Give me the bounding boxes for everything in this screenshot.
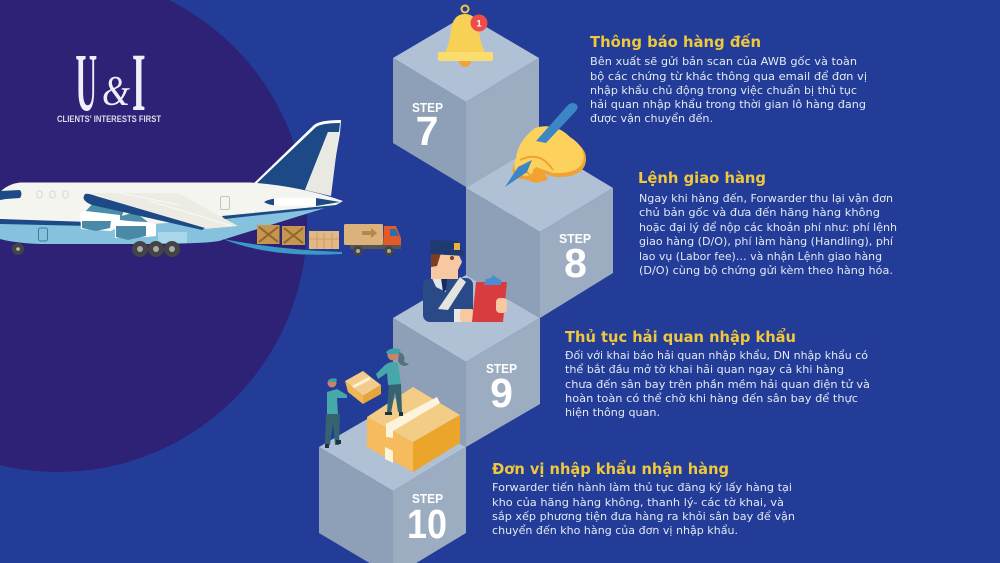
body: step 7: hải quan nhập khẩu trong thời gian lô hàng đang [590,98,866,111]
heading: step 10: Đơn vị nhập khẩu nhận hàng [492,459,729,478]
body: step 7: bộ các chứng từ khác thông qua email để đơn vị [590,70,867,83]
officer hat [430,240,464,256]
cube: step 9 [393,275,540,447]
body: step 8: chủ bản gốc và đưa đến hãng hàng không [639,206,880,219]
text block: step 9 [565,327,870,419]
logo: U&I: I [132,36,146,128]
step 8 number: 8 [564,240,587,286]
body: step 8: hoặc đại lý để nộp các khoản phí như: phí lệnh [639,221,897,234]
icon: worker woman [376,348,409,416]
body: step 8: Ngay khi hàng đến, Forwarder thu lại vận đơn [639,192,893,205]
heading: step 7: Thông báo hàng đến [590,32,761,51]
icon: hand with pen [505,103,586,187]
body stripes [0,205,336,226]
logo: U&I: U [76,37,97,129]
step 10 number: 10 [407,501,447,547]
wing [92,193,238,229]
step 7 number: 7 [416,108,438,154]
body: step 7: Bên xuất sẽ gửi bản scan của AWB gốc và toàn [590,55,857,68]
cube: step 7 [393,15,539,190]
engine 1 [80,211,120,231]
pylons [84,200,148,222]
purple background circle [0,0,307,472]
white cuff and hand [454,309,462,322]
icon: worker man [325,378,347,448]
body: step 7: nhập khẩu chủ động trong việc chuẩn bị thủ tục [590,84,857,97]
logo: U&I: CLIENTS' INTERESTS FIRST [57,114,161,125]
step 8 label: STEP [559,231,591,246]
logo: U&I: & [102,69,130,115]
cargo crates and truck [257,224,401,256]
body: step 9: chưa đến sân bay trên phần mềm hải quan điện tử và [565,378,870,391]
body: step 9: Đối với khai báo hải quan nhập khẩu, DN nhập khẩu có [565,349,868,362]
crate 1 [257,225,280,244]
step 9 label: STEP [486,361,517,376]
cabin windows [37,191,230,241]
body: step 10: Forwarder tiến hành làm thủ tục đăng ký lấy hàng tại [492,481,792,494]
tail fin [252,120,341,196]
body: step 9 [565,349,870,419]
cube: step 8 [466,144,613,318]
truck [344,224,401,256]
cargo ramp [223,239,342,255]
clipboard [472,282,507,322]
body: step 9: thể bắt đầu mở tờ khai hải quan ngay cả khi hàng [565,363,844,376]
body: step 10: kho của hãng hàng không, thanh lý- các tờ khai, và [492,496,784,509]
notification badge: 1 [476,18,482,30]
airplane illustration [0,120,343,257]
engine 2 [115,220,156,240]
text block: step 7 [590,32,867,125]
officer face [431,253,462,279]
body: step 10: chuyển đến kho hàng của đơn vị nhập khẩu. [492,524,738,537]
text block: step 8 [638,169,897,277]
stacked boxes [309,231,339,249]
cube: step 10 [319,404,466,563]
heading: step 8: Lệnh giao hàng [638,169,766,187]
body: step 9: hoàn toàn có thể chờ khi hàng đến sân bay để thực [565,392,858,405]
fuselage [0,182,343,226]
heading: step 9: Thủ tục hải quan nhập khẩu [565,327,796,346]
body: step 8: giao hàng (D/O), phí làm hàng (Handling), phí [639,235,894,248]
body: step 7 [590,55,867,125]
icon: big cardboard box [367,387,460,472]
tail engine [264,198,340,206]
step 9 number: 9 [490,370,513,416]
icon: small box carried [345,371,381,404]
wing leading edge [84,194,205,230]
body: step 8: (D/O) cùng bộ chứng gửi kèm theo hàng hóa. [639,264,893,277]
body: step 8: lao vụ (Labor fee)… và nhận Lệnh giao hàng [639,250,882,263]
body: step 9: hiện thông quan. [565,406,660,419]
crate 2 [282,226,305,245]
body: step 10 [492,481,795,537]
logo: U&I [57,36,161,129]
icon: bell [438,6,493,67]
landing gear [12,241,180,257]
cockpit window [0,190,22,200]
belly [0,204,338,244]
body: step 8 [639,192,897,277]
step 10 label: STEP [412,491,443,506]
pen [536,103,578,143]
text block: step 10 [492,459,795,537]
step 7 label: STEP [412,100,443,115]
body: step 7: được vận chuyển đến. [590,112,713,125]
icon: customs officer [423,240,507,322]
body: step 10: sắp xếp phương tiện đưa hàng ra khỏi sân bay để vận [492,510,795,523]
